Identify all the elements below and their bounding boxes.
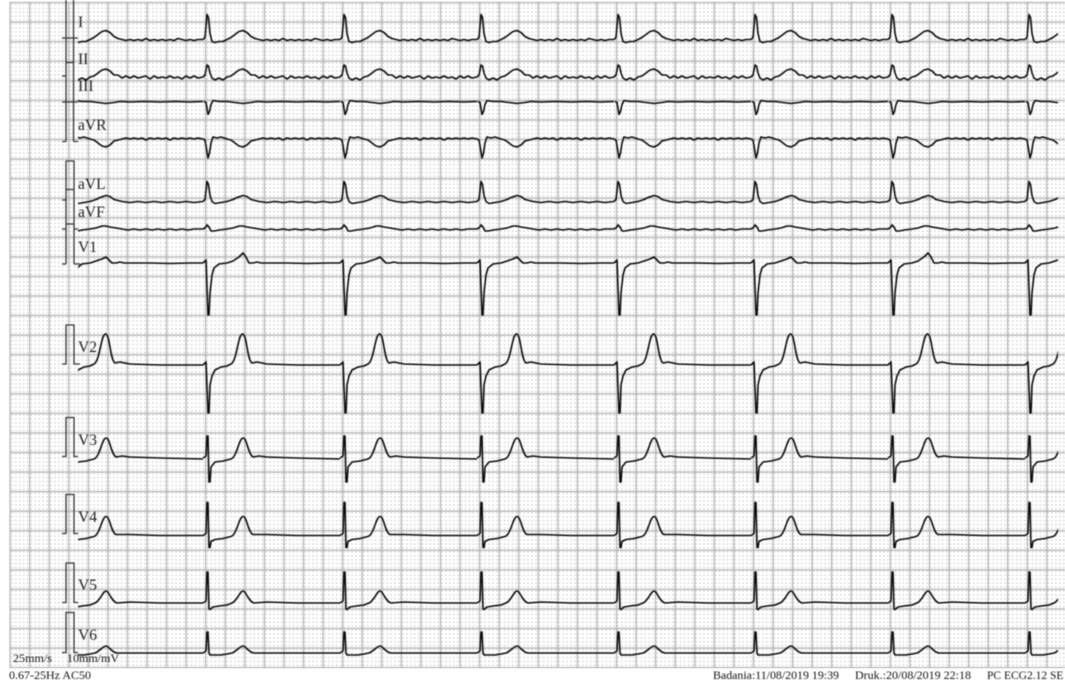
lead I trace	[66, 14, 1065, 42]
lead aVF trace	[66, 225, 1065, 231]
calibration mark: V2	[62, 325, 80, 364]
calibration mark: V6	[62, 612, 78, 652]
calibration mark: V4	[62, 494, 78, 534]
lead aVL	[66, 176, 1065, 204]
lead II trace	[66, 65, 1065, 80]
lead V3	[66, 432, 1065, 482]
lead III trace	[67, 100, 1065, 114]
lead aVF	[66, 204, 1065, 231]
filter settings: 0.67-25Hz AC50	[9, 670, 91, 682]
lead V1 trace	[66, 253, 1065, 315]
calibration marks: aVL, aVF, V1	[62, 161, 80, 264]
lead V1 label: V1	[78, 239, 97, 256]
lead V2	[66, 334, 1065, 413]
lead V3 trace	[66, 436, 1065, 482]
paper speed: 25mm/s	[13, 653, 53, 665]
lead aVR trace	[66, 137, 1065, 158]
lead V6 label: V6	[78, 627, 97, 644]
lead V4	[66, 502, 1065, 548]
print date: Druk.:20/08/2019 22:18	[855, 670, 971, 682]
lead aVR label: aVR	[78, 117, 107, 134]
lead V5	[66, 572, 1065, 610]
gain: 10mm/mV	[67, 653, 120, 665]
lead V2 label: V2	[78, 339, 97, 356]
lead aVF label: aVF	[78, 204, 105, 221]
lead III label: III	[78, 78, 94, 95]
calibration marks: I, II, III, aVR	[62, 0, 78, 142]
lead I label: I	[78, 14, 83, 31]
lead V5 trace	[66, 572, 1065, 610]
calibration mark: V5	[62, 563, 78, 602]
lead aVL label: aVL	[78, 176, 106, 193]
calibration mark: V3	[62, 418, 78, 456]
recording date: Badania:11/08/2019 19:39	[713, 670, 839, 682]
lead V1	[66, 239, 1065, 315]
lead V6	[66, 627, 1065, 655]
lead aVR	[66, 117, 1065, 158]
lead V4 label: V4	[78, 509, 97, 526]
lead V2 trace	[66, 334, 1065, 413]
lead I	[66, 14, 1065, 42]
lead aVL trace	[66, 182, 1065, 204]
lead II	[66, 51, 1065, 80]
lead V5 label: V5	[78, 577, 97, 594]
lead III	[67, 78, 1065, 114]
lead V6 trace	[66, 632, 1065, 655]
software version: PC ECG2.12 SE	[987, 670, 1063, 682]
lead V4 trace	[66, 502, 1065, 548]
lead V3 label: V3	[78, 432, 97, 449]
lead II label: II	[78, 51, 88, 68]
